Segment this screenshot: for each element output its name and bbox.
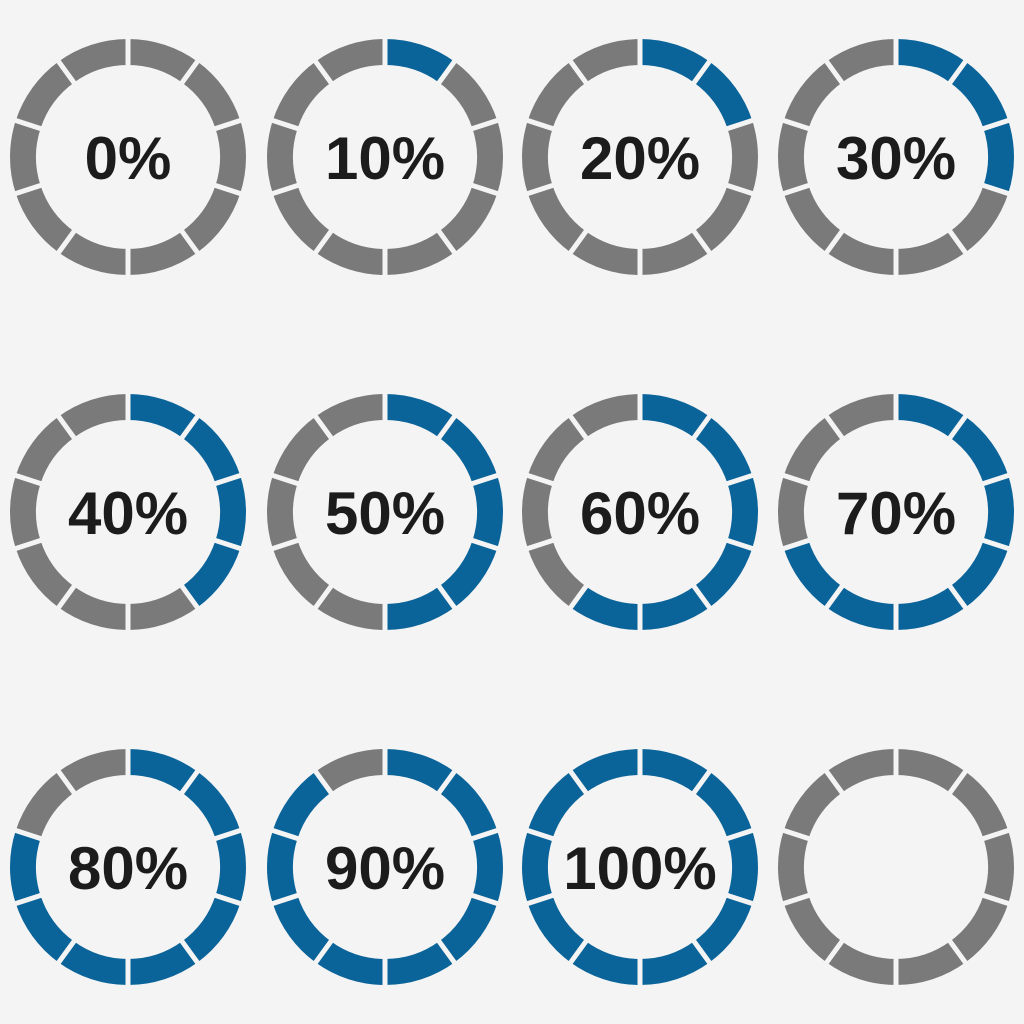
ring: 80%: 80% bbox=[68, 835, 188, 902]
ring: 80% bbox=[10, 743, 246, 991]
ring: 60%: 60% bbox=[580, 480, 700, 547]
ring: 40%: 40% bbox=[68, 480, 188, 547]
ring: 60% bbox=[522, 388, 758, 636]
ring: 30%: 30% bbox=[836, 125, 956, 192]
ring: 30% bbox=[778, 33, 1014, 281]
ring: 90%: 90% bbox=[325, 835, 445, 902]
ring: 50% bbox=[267, 388, 503, 636]
ring: 20%: 20% bbox=[580, 125, 700, 192]
ring: 50%: 50% bbox=[325, 480, 445, 547]
ring: 40% bbox=[10, 388, 246, 636]
ring: 90% bbox=[267, 743, 503, 991]
ring: empty bbox=[778, 743, 1014, 991]
ring: 70%: 70% bbox=[836, 480, 956, 547]
ring: 0%: 0% bbox=[85, 125, 171, 192]
ring: 10%: 10% bbox=[325, 125, 445, 192]
ring: 100%: 100% bbox=[563, 835, 717, 902]
ring: 100% bbox=[522, 743, 758, 991]
ring: 20% bbox=[522, 33, 758, 281]
ring: 10% bbox=[267, 33, 503, 281]
ring: 70% bbox=[778, 388, 1014, 636]
ring: 0% bbox=[10, 33, 246, 281]
